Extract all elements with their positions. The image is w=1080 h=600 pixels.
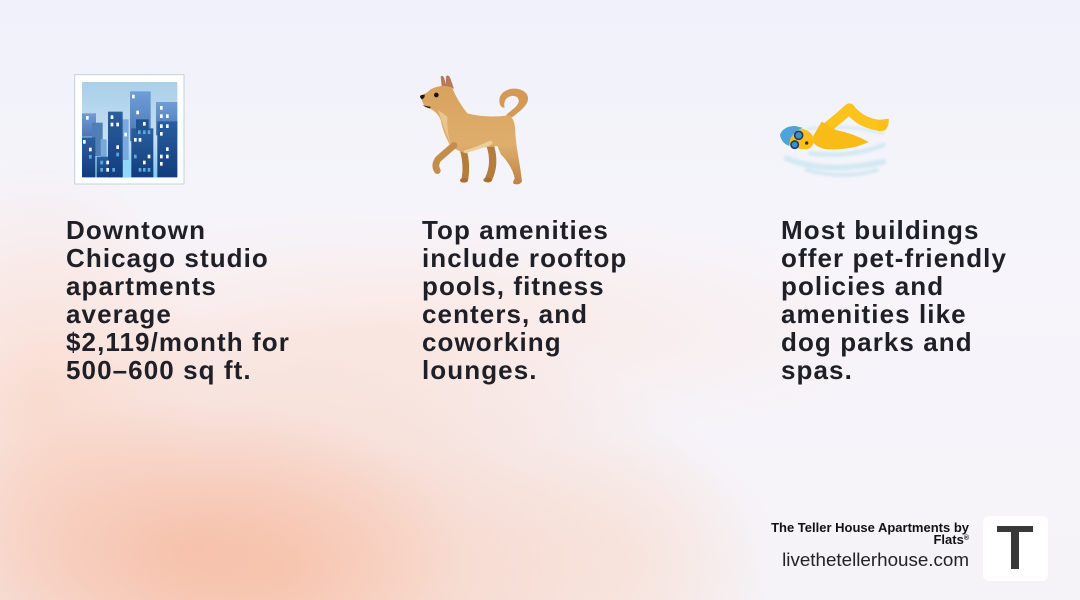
text: top amenities: coworking <box>422 327 562 357</box>
logo tile <box>983 516 1048 581</box>
text: top amenities: Top amenities <box>422 215 609 245</box>
text: pet-friendly buildings: amenities like <box>781 299 967 329</box>
text: studio rent: Downtown <box>66 215 206 245</box>
text: top amenities: pools, fitness <box>422 271 605 301</box>
text: studio rent: 500–600 sq ft. <box>66 355 252 385</box>
text: pet-friendly buildings: offer pet-friendly <box>781 243 1007 273</box>
text: top amenities: lounges. <box>422 355 538 385</box>
text: pet-friendly buildings <box>781 215 1007 385</box>
text: pet-friendly buildings: Most buildings <box>781 215 980 245</box>
website url: livethetellerhouse.com <box>782 549 969 570</box>
text: pet-friendly buildings: policies and <box>781 271 944 301</box>
text: top amenities: include rooftop <box>422 243 627 273</box>
text: top amenities <box>422 215 627 385</box>
text: pet-friendly buildings: dog parks and <box>781 327 973 357</box>
text: top amenities: centers, and <box>422 299 588 329</box>
text: studio rent: average <box>66 299 172 329</box>
text: studio rent: apartments <box>66 271 217 301</box>
text: pet-friendly buildings: spas. <box>781 355 853 385</box>
text: studio rent: $2,119/month for <box>66 327 290 357</box>
logo letter T <box>997 526 1033 569</box>
text: studio rent <box>66 215 290 385</box>
text: studio rent: Chicago studio <box>66 243 269 273</box>
